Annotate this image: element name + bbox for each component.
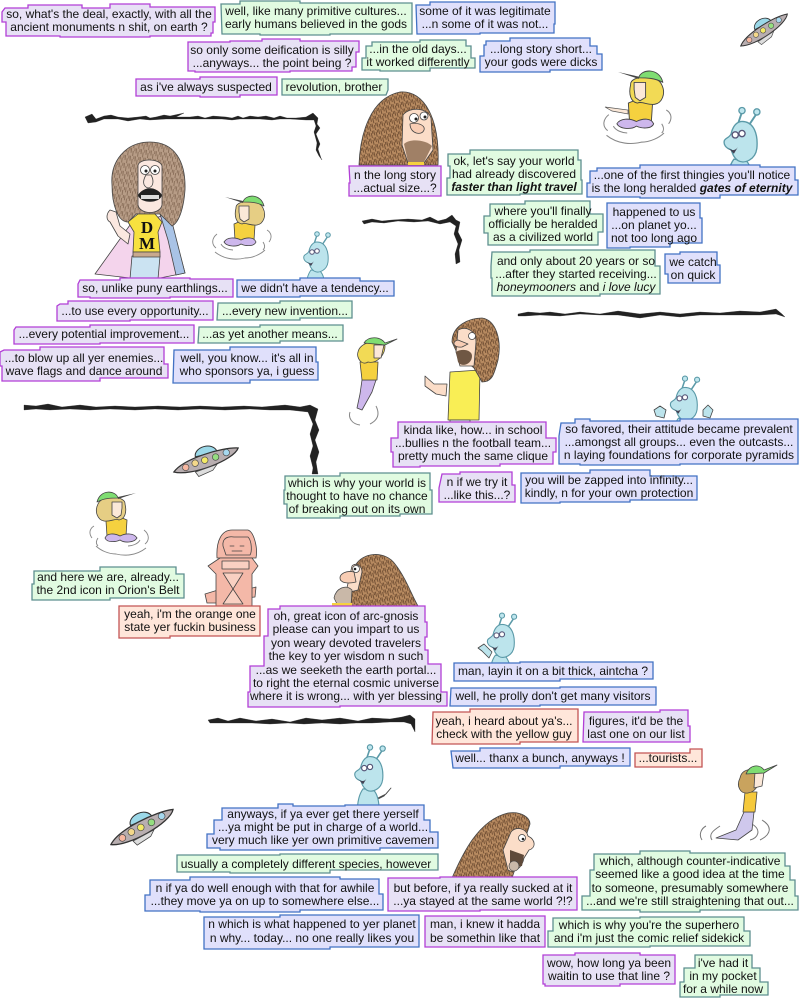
speech bubble: unlike puny earthlings	[78, 278, 233, 298]
icon: flying saucer lower left	[104, 802, 180, 853]
barbed line: middle right	[362, 215, 462, 264]
character: caped hero	[95, 142, 185, 279]
speech bubble: had it in my pocket: i've had it	[698, 956, 749, 970]
speech bubble: great icon of arc-gnosis: yon weary devoted travelers	[271, 636, 421, 650]
speech bubble: only some deification: ...anyways... the point being ?	[193, 56, 352, 70]
speech bubble: superhero and sidekick	[548, 917, 750, 947]
speech bubble: no chance of breaking out: thought to have no chance	[286, 489, 428, 503]
speech bubble: great icon of arc-gnosis: where it is wrong... with yer blessing	[249, 689, 442, 703]
speech bubble: happened to us: happened to us	[613, 205, 695, 219]
speech bubble: long story short	[480, 38, 602, 72]
speech bubble: 2nd icon in Orion's Belt	[32, 567, 184, 600]
speech bubble: wow, how long: wow, how long ya been	[546, 956, 671, 970]
speech bubble: gates of eternity	[587, 165, 798, 198]
speech bubble: heralded as a civilized world: as a civilized world	[493, 230, 593, 244]
speech bubble: had it in my pocket	[680, 955, 768, 997]
character: alien lower	[355, 745, 391, 812]
character: sidekick floating left	[213, 196, 271, 259]
character: long-haired guy top	[359, 92, 438, 165]
speech bubble: sucked at it	[388, 877, 577, 911]
speech bubble: only some deification	[188, 39, 359, 72]
character: bearded guy profile	[332, 554, 418, 606]
speech bubble: great icon of arc-gnosis: oh, great icon of arc-gnosis	[274, 609, 418, 623]
speech bubble: happened to us: ...on planet yo...	[611, 218, 697, 232]
speech bubble: every opportunity	[57, 301, 213, 321]
speech bubble: didn't have a tendency	[237, 278, 394, 297]
speech bubble: great icon of arc-gnosis: please can you impart to us	[273, 622, 419, 636]
character: alien lower middle	[478, 613, 517, 677]
speech bubble: the long story: n the long story	[354, 168, 436, 182]
speech bubble: primitive cavemen	[207, 804, 438, 850]
speech bubble: we catch on quick	[665, 252, 720, 283]
speech bubble: so, what's the deal	[2, 4, 215, 37]
speech bubble: no one really likes you: n why... today... no one really likes you	[210, 931, 414, 945]
speech bubble: honeymooners	[491, 250, 660, 296]
character: sidekick sitting lower left	[90, 492, 148, 555]
speech bubble: who sponsors ya: well, you know... it's all in	[179, 351, 314, 365]
speech bubble: do well enough: ...they move ya on up to somewhere else...	[151, 894, 379, 908]
icon: flying saucer middle	[170, 441, 242, 481]
speech bubble: wow, how long: waitin to use that line ?	[547, 969, 670, 983]
speech bubble: zapped into infinity: you will be zapped into infinity...	[525, 473, 693, 487]
speech bubble: zapped into infinity	[521, 470, 697, 503]
speech bubble: still straightening that out: which, although counter-indicative	[599, 854, 781, 868]
speech bubble: didn't have a tendency: we didn't have a tendency...	[240, 281, 389, 295]
speech bubble: so, what's the deal: ancient monuments n shit, on earth ?	[10, 20, 208, 34]
speech bubble: blow up all yer enemies	[0, 347, 168, 381]
speech bubble: figures: last one on our list	[587, 727, 685, 741]
speech bubble: the orange one: state yer fuckin business	[124, 620, 256, 634]
speech bubble: yellow guy: yeah, i heard about ya's...	[435, 714, 573, 728]
character: sidekick falling	[349, 338, 397, 425]
speech bubble: school clique: kinda like, how... in school	[404, 423, 542, 437]
character: alien waving	[654, 376, 713, 440]
character: stone idol	[205, 530, 258, 606]
speech bubble: sucked at it: ...ya stayed at the same world ?!?	[393, 894, 573, 908]
speech bubble: 2nd icon in Orion's Belt: the 2nd icon in Orion's Belt	[36, 583, 180, 597]
speech bubble: who sponsors ya: who sponsors ya, i guess	[179, 364, 314, 378]
barbed line: upper right	[518, 309, 785, 318]
character: alien left	[304, 232, 330, 290]
speech bubble: faster than light travel: faster than light travel	[451, 180, 577, 194]
speech bubble: faster than light travel: ok, let's say your world	[453, 154, 575, 168]
speech bubble: revolution, brother: revolution, brother	[286, 80, 382, 94]
speech bubble: primitive cultures: well, like many primitive cultures...	[224, 4, 407, 18]
speech bubble: happened to us: not too long ago	[611, 231, 697, 245]
character: caped hero: D	[141, 218, 153, 237]
speech bubble: still straightening that out: ...and we're still straightening that out...	[586, 894, 794, 908]
speech bubble: i knew it	[425, 916, 545, 947]
character: sidekick kneeling right	[700, 765, 777, 840]
speech bubble: school clique: ...bullies n the football team...	[395, 436, 551, 450]
speech bubble: every opportunity: ...to use every opportunity...	[61, 304, 209, 318]
speech bubble: corporate pyramids: n laying foundations for corporate pyramids	[564, 448, 794, 462]
speech bubble: long story short: your gods were dicks	[485, 55, 597, 69]
speech bubble: in the old days: it worked differently	[366, 55, 470, 69]
speech bubble: great icon of arc-gnosis	[248, 606, 447, 707]
speech bubble: not many visitors: well, he prolly don't get many visitors	[454, 689, 651, 703]
speech bubble: as i've always suspected	[136, 77, 277, 97]
speech bubble: figures	[583, 710, 690, 742]
speech bubble: if we try it	[439, 472, 515, 502]
speech bubble: school clique: pretty much the same clique	[398, 449, 548, 463]
speech bubble: corporate pyramids: ...amongst all groups... even the outcasts...	[565, 435, 793, 449]
speech bubble: not many visitors	[450, 687, 656, 706]
character: sidekick pointing top	[604, 71, 671, 143]
speech bubble: corporate pyramids	[559, 419, 798, 465]
speech bubble: every potential improvement: ...every potential improvement...	[19, 327, 189, 341]
speech bubble: so, what's the deal: so, what's the deal, exactly, with all the	[6, 7, 212, 21]
speech bubble: thanx a bunch	[451, 748, 630, 768]
speech bubble: we catch on quick: we catch	[668, 255, 717, 269]
speech bubble: no one really likes you	[204, 915, 419, 949]
speech bubble: happened to us	[607, 203, 702, 248]
speech bubble: the long story: ...actual size...?	[353, 181, 437, 195]
speech bubble: yellow guy	[432, 709, 578, 744]
speech bubble: do well enough: n if ya do well enough with that for awhile	[156, 881, 375, 895]
speech bubble: gates of eternity: ...one of the first thingies you'll notice	[594, 168, 791, 182]
speech bubble: faster than light travel	[447, 150, 582, 195]
speech bubble: 2nd icon in Orion's Belt: and here we are, already...	[37, 570, 179, 584]
barbed line: top left	[85, 113, 322, 160]
character: caped hero: M	[139, 234, 155, 253]
speech bubble: primitive cultures	[221, 1, 412, 35]
speech bubble: we catch on quick: on quick	[671, 268, 716, 282]
barbed line: middle left	[24, 404, 319, 474]
speech bubble: no one really likes you: n which is what happened to yer planet	[208, 917, 416, 931]
speech bubble: great icon of arc-gnosis: the key to yer wisdom n such	[269, 649, 423, 663]
speech bubble: primitive cultures: early humans believed in the gods	[225, 17, 407, 31]
speech bubble: only some deification: so only some deification is silly	[190, 43, 354, 57]
speech bubble: i knew it: man, i knew it hadda	[430, 917, 540, 931]
speech bubble: zapped into infinity: kindly, n for your own protection	[525, 486, 693, 500]
speech bubble: superhero and sidekick: which is why you're the superhero	[558, 918, 740, 932]
speech bubble: i knew it: be somethin like that	[430, 931, 541, 945]
speech bubble: primitive cavemen: anyways, if ya ever get there yerself	[227, 807, 419, 821]
speech bubble: some of it was legitimate: ...n some of it was not...	[422, 17, 548, 31]
speech bubble: still straightening that out	[582, 851, 798, 912]
speech bubble: some of it was legitimate	[416, 2, 555, 34]
speech bubble: if we try it: n if we try it	[447, 475, 508, 489]
speech bubble: honeymooners: ...after they started receiving...	[495, 267, 657, 281]
speech bubble: every potential improvement	[14, 325, 194, 344]
speech bubble: the long story	[349, 166, 441, 196]
speech bubble: great icon of arc-gnosis: to right the eternal cosmic universe	[253, 676, 439, 690]
speech bubble: as i've always suspected: as i've always suspected	[140, 80, 272, 94]
speech bubble: every new invention	[217, 301, 352, 320]
speech bubble: wow, how long	[543, 953, 675, 986]
speech bubble: honeymooners: honeymooners and i love lucy	[497, 280, 656, 294]
character: long-haired guy shouting	[452, 813, 534, 878]
speech bubble: the orange one	[119, 606, 260, 638]
speech bubble: had it in my pocket: in my pocket	[689, 969, 757, 983]
speech bubble: long story short: ...long story short...	[490, 42, 592, 56]
character: long-haired guy pointing	[425, 318, 499, 424]
speech bubble: layin it on thick: man, layin it on a bit thick, aintcha ?	[458, 664, 648, 678]
speech bubble: honeymooners: and only about 20 years or so	[497, 254, 655, 268]
speech bubble: school clique	[391, 422, 556, 467]
speech bubble: heralded as a civilized world	[484, 201, 603, 245]
speech bubble: who sponsors ya	[173, 347, 318, 383]
speech bubble: sucked at it: but before, if ya really sucked at it	[394, 881, 573, 895]
speech bubble: heralded as a civilized world: officially be heralded	[488, 217, 598, 231]
speech bubble: if we try it: ...like this...?	[444, 488, 511, 502]
speech bubble: no chance of breaking out: which is why your world is	[287, 476, 426, 490]
barbed line: lower middle	[208, 715, 415, 732]
speech bubble: still straightening that out: seemed like a good idea at the time	[595, 867, 785, 881]
speech bubble: some of it was legitimate: some of it was legitimate	[419, 4, 551, 18]
speech bubble: every new invention: ...every new invention...	[222, 304, 348, 318]
speech bubble: primitive cavemen: very much like yer own primitive cavemen	[212, 833, 434, 847]
speech bubble: heralded as a civilized world: where you'll finally	[493, 204, 592, 218]
speech bubble: great icon of arc-gnosis: ...as we seeketh the earth portal...	[256, 663, 436, 677]
speech bubble: in the old days	[362, 40, 475, 71]
speech bubble: figures: figures, it'd be the	[589, 714, 683, 728]
speech bubble: blow up all yer enemies: ...to blow up all yer enemies...	[5, 351, 163, 365]
speech bubble: corporate pyramids: so favored, their attitude became prevalent	[565, 422, 793, 436]
speech bubble: in the old days: ...in the old days...	[369, 42, 467, 56]
speech bubble: blow up all yer enemies: wave flags and dance around	[5, 364, 162, 378]
speech bubble: no chance of breaking out	[284, 473, 432, 518]
speech bubble: do well enough	[145, 877, 383, 912]
speech bubble: thanx a bunch: well... thanx a bunch, anyways !	[454, 751, 625, 765]
speech bubble: different species: usually a completely different species, however	[181, 857, 431, 871]
speech bubble: yet another means: ...as yet another means...	[202, 327, 338, 341]
speech bubble: tourists	[635, 749, 702, 767]
speech bubble: no chance of breaking out: of breaking out on its own	[289, 502, 425, 516]
speech bubble: still straightening that out: to someone, presumably somewhere	[592, 881, 789, 895]
speech bubble: yellow guy: check with the yellow guy	[436, 727, 572, 741]
icon: flying saucer top right	[734, 8, 794, 53]
speech bubble: superhero and sidekick: and i'm just the comic relief sidekick	[554, 931, 745, 945]
speech bubble: unlike puny earthlings: so, unlike puny earthlings...	[82, 281, 228, 295]
speech bubble: gates of eternity: is the long heralded gates of eternity	[592, 181, 794, 195]
speech bubble: the orange one: yeah, i'm the orange one	[124, 607, 256, 621]
speech bubble: primitive cavemen: ...ya might be put in charge of a world...	[218, 820, 428, 834]
character: alien top right	[724, 107, 760, 186]
speech bubble: faster than light travel: had already discovered	[452, 167, 576, 181]
speech bubble: had it in my pocket: for a while now	[683, 982, 763, 996]
speech bubble: tourists: ...tourists...	[639, 751, 697, 765]
